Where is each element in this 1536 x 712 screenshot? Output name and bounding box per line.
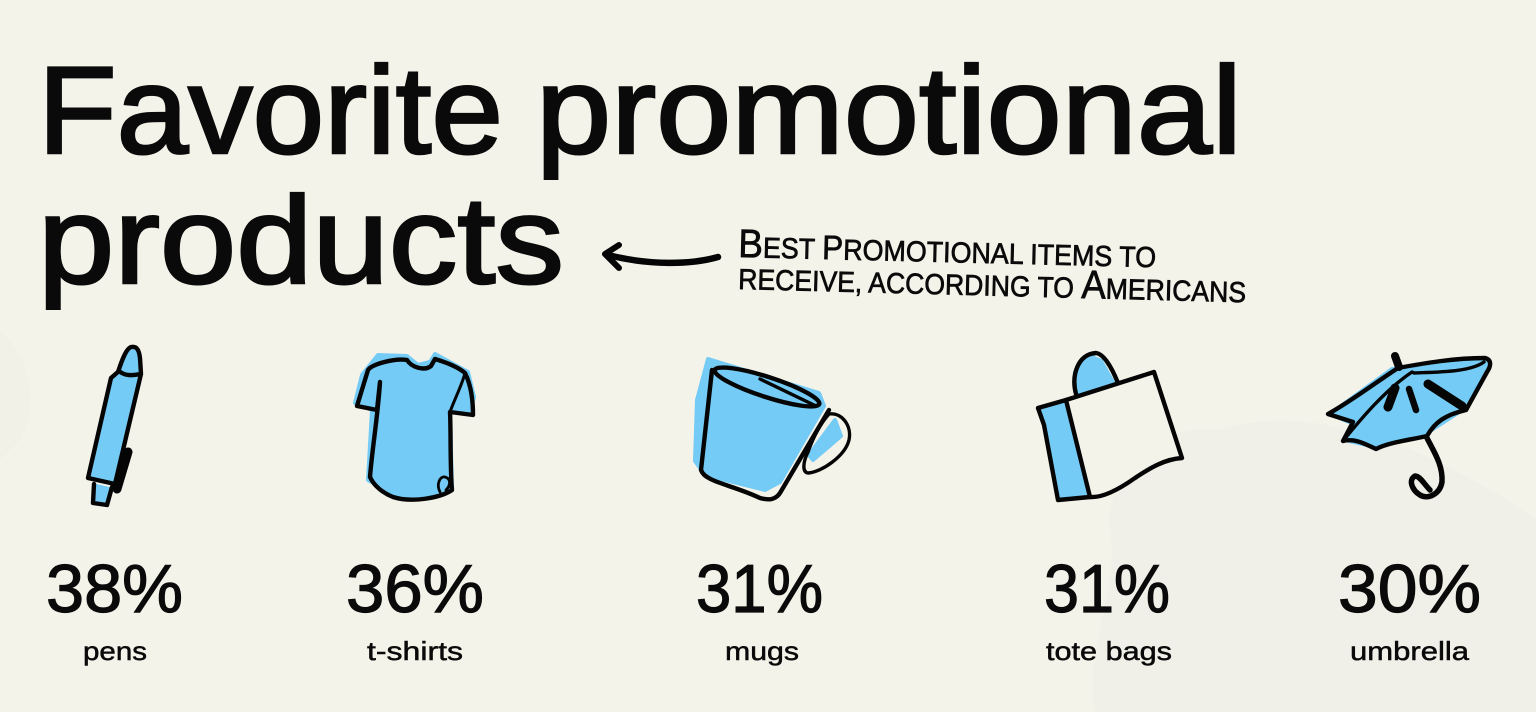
stat: mugs [696, 551, 823, 666]
subtitle note: BEST PROMOTIONAL ITEMS TO [738, 222, 1157, 276]
stat: tote bags: 31% [1044, 551, 1170, 627]
arrow [605, 245, 718, 268]
stat: umbrella [1338, 551, 1481, 666]
icon: tote bag [1038, 353, 1182, 500]
title: promotional [536, 42, 1242, 180]
icon: umbrella [1328, 356, 1490, 497]
stat: pens [46, 551, 183, 666]
stat: umbrella: 30% [1338, 551, 1481, 627]
icon: t-shirt [355, 354, 474, 500]
stat: t-shirts: 36% [346, 551, 484, 627]
stat: mugs: mugs [725, 636, 799, 666]
stat: tote bags [1044, 551, 1172, 666]
title: Favorite [38, 42, 503, 180]
subtitle note: RECEIVE, ACCORDING TO AMERICANS [738, 254, 1247, 311]
stat: mugs: 31% [696, 551, 823, 627]
stat: pens: 38% [46, 551, 183, 627]
stat: t-shirts [346, 551, 484, 666]
title: products [38, 172, 564, 310]
stat: tote bags: tote bags [1046, 636, 1172, 666]
stat: pens: pens [83, 636, 147, 666]
icon: pen [88, 347, 141, 505]
subtitle note [738, 222, 1247, 311]
stat: umbrella: umbrella [1350, 636, 1470, 666]
title [38, 42, 1242, 310]
stat: t-shirts: t-shirts [367, 636, 463, 666]
icon: mug [695, 359, 850, 499]
